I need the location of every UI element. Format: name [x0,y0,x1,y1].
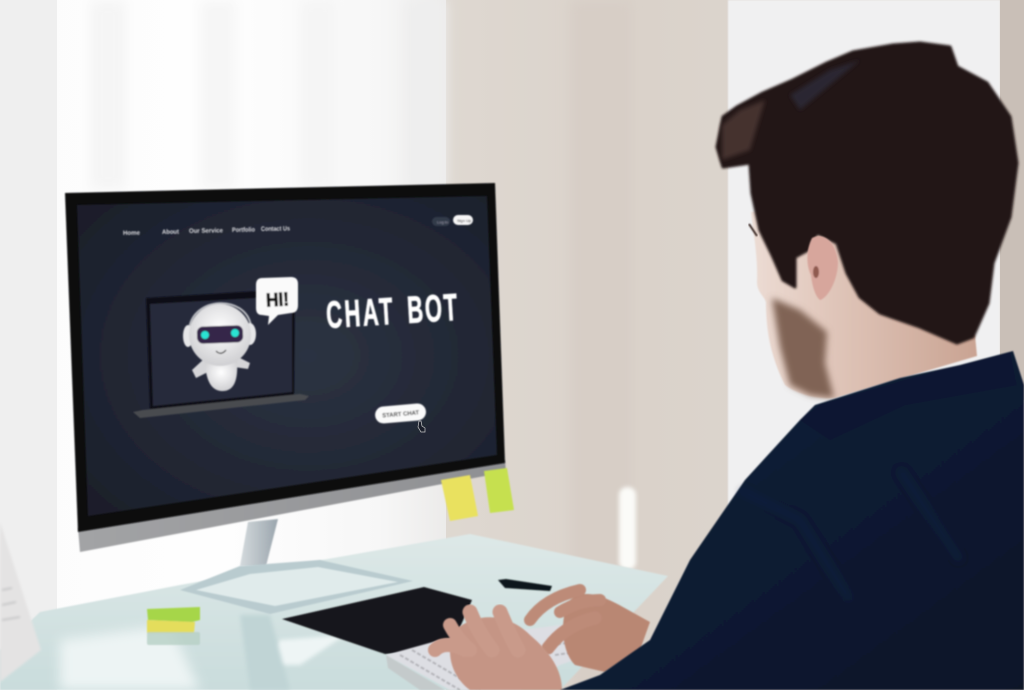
log in and sign up buttons [432,215,473,226]
monitor stand [180,519,413,614]
heading: CHAT BOT: BOT [406,286,460,332]
monitor silver chin [78,460,506,552]
beard [772,298,834,398]
laptop illustration [133,290,309,418]
heading: CHAT BOT: CHAT [325,290,396,337]
man's neck and face [751,210,977,398]
website navigation menu: Home [123,230,140,237]
monitor black frame [65,183,505,532]
website navigation menu: Contact Us [261,225,290,233]
shirt [560,351,1024,690]
man's right hand on keyboard [530,590,650,672]
drawing tablet [282,587,472,654]
website navigation menu: About [162,229,180,236]
yellow sticky note on monitor [441,475,478,521]
speech bubble: HI! [256,277,298,325]
man's hair [717,43,1017,343]
light reflection on wall [619,487,636,570]
log in and sign up buttons: Log In [437,220,448,224]
paper card on desk [0,522,41,682]
green sticky note on monitor [484,468,514,513]
start chat button: START CHAT [382,410,420,420]
robot mascot with headset [183,303,256,391]
hair highlights [722,60,860,160]
heading: CHAT BOT [325,286,460,337]
website navigation menu: Our Service [189,227,223,235]
glass desk [0,534,668,690]
ear [807,236,838,300]
icon: hand cursor [418,421,425,432]
website navigation menu [123,225,290,237]
website navigation menu: Portfolio [232,227,255,234]
keyboard [386,625,608,690]
black pen [498,579,552,591]
speech bubble: HI!: HI! [265,289,290,312]
eyebrow [749,224,757,236]
monitor screen [77,196,497,516]
monitor [65,183,506,552]
sticky note stack on desk [147,607,200,645]
start chat button [374,403,427,424]
background: white pillar and right wall [728,0,1024,510]
log in and sign up buttons: Sign Up [457,218,472,223]
man's left hand on keyboard [435,612,562,690]
shirt collar and fold shading [800,352,1016,440]
background: window curtain [0,0,446,690]
